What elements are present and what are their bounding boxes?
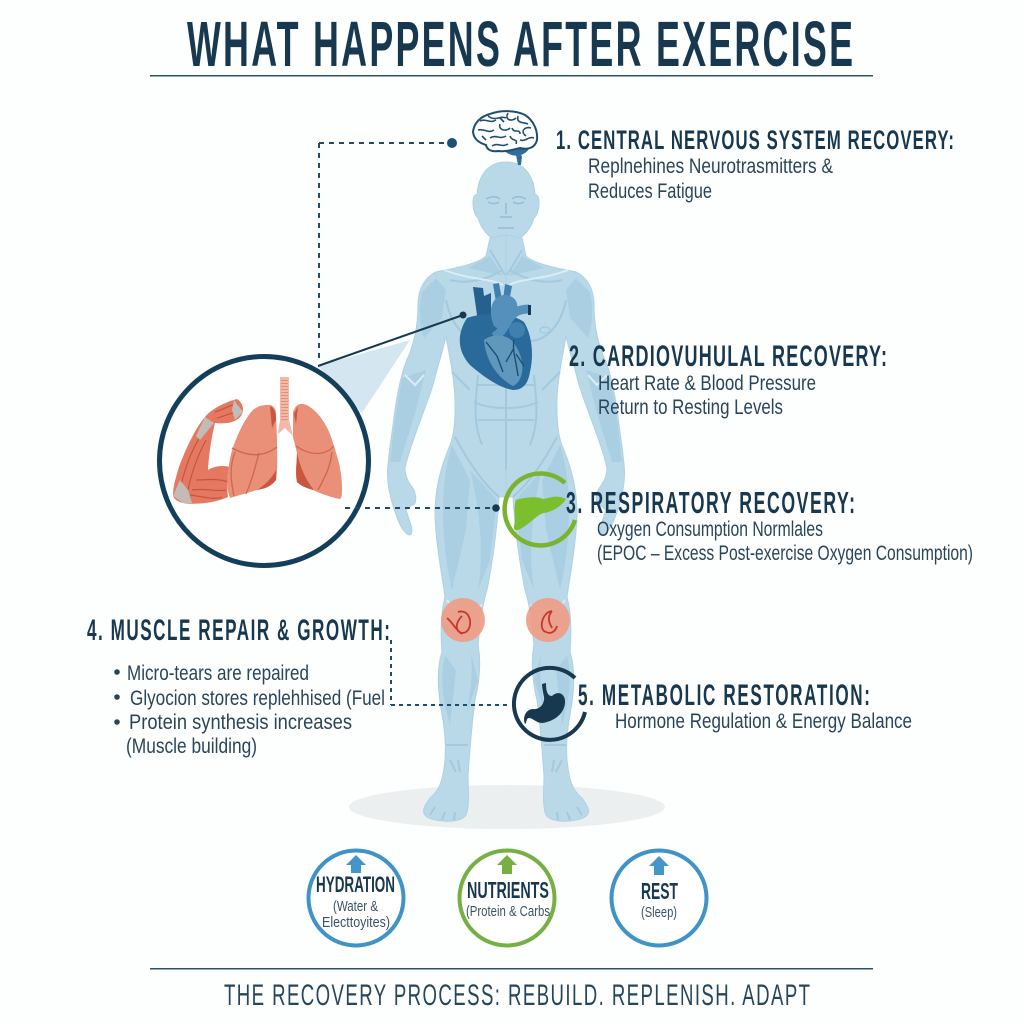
connector: circle to liver [345,504,500,512]
connector: heart to circle [318,312,466,366]
badge: nutrients [460,850,554,946]
muscle shading [390,256,622,725]
arrow: rest [649,856,669,875]
description 1 [588,155,833,203]
icon: knee joints [441,598,570,642]
arrow: hydration [346,855,366,873]
description 2: Return to Resting Levels [598,396,783,419]
bullet list: (Muscle building) [126,735,257,758]
icon: lungs and trachea [227,377,342,499]
bullet list: Glyocion stores replehhised (Fuel [130,687,385,710]
description 5: Hormone Regulation & Energy Balance [615,710,912,733]
badge: hydration: (Water & [333,898,378,915]
description 1: Replnehines Neurotrasmitters & [588,155,833,178]
muscle lines [430,250,582,820]
badge: hydration: HYDRATION [316,872,395,897]
heading 5: 5. METABOLIC RESTORATION: [578,679,870,712]
human body figure [387,162,625,821]
callout circle: muscle and lungs [160,356,368,566]
face [486,197,526,228]
description 3 [597,518,973,565]
icon: liver [505,473,575,545]
arrow: nutrients [497,855,517,874]
description 2 [598,372,816,419]
text block 2: cardiovascular [569,341,887,419]
heading 3: 3. RESPIRATORY RECOVERY: [566,486,855,520]
description 1: Reduces Fatigue [588,180,712,203]
text block 5: metabolic restoration [578,679,912,733]
icon: heart [460,283,532,390]
title: WHAT HAPPENS AFTER EXERCISE [187,8,853,80]
badge: rest: (Sleep) [641,904,677,921]
connector: brain to circle [319,138,457,362]
bullet list: Micro-tears are repaired [127,662,309,685]
ground shadow [349,785,665,829]
bullet list [114,662,385,758]
magnifier cone [318,340,410,413]
footer tagline: THE RECOVERY PROCESS: REBUILD. REPLENISH. ADAPT [224,979,810,1012]
badge: rest: REST [641,878,678,904]
badge: hydration [308,850,404,946]
icon: stomach [514,668,585,740]
connector: muscle text to stomach [391,640,510,705]
badge: nutrients: (Protein & Carbs [466,903,550,920]
text block 3: respiratory [566,486,973,565]
icon: brain [473,111,537,165]
heading 1: 1. CENTRAL NERVOUS SYSTEM RECOVERY: [556,125,954,155]
description 2: Heart Rate & Blood Pressure [598,372,816,395]
bullet list: Protein synthesis increases [129,711,352,734]
heading 2: 2. CARDIOVUHULAL RECOVERY: [569,341,887,373]
badge: nutrients: NUTRIENTS [467,877,549,903]
badge: rest [612,850,706,946]
icon: flexed arm muscle [173,399,243,504]
description 3: Oxygen Consumption Normlales [597,518,823,541]
heading 4: 4. MUSCLE REPAIR & GROWTH: [87,614,390,647]
badge: hydration: Electtoyites) [322,914,390,931]
text block 1: central nervous system [556,125,954,203]
text block 4: muscle repair [87,614,390,758]
